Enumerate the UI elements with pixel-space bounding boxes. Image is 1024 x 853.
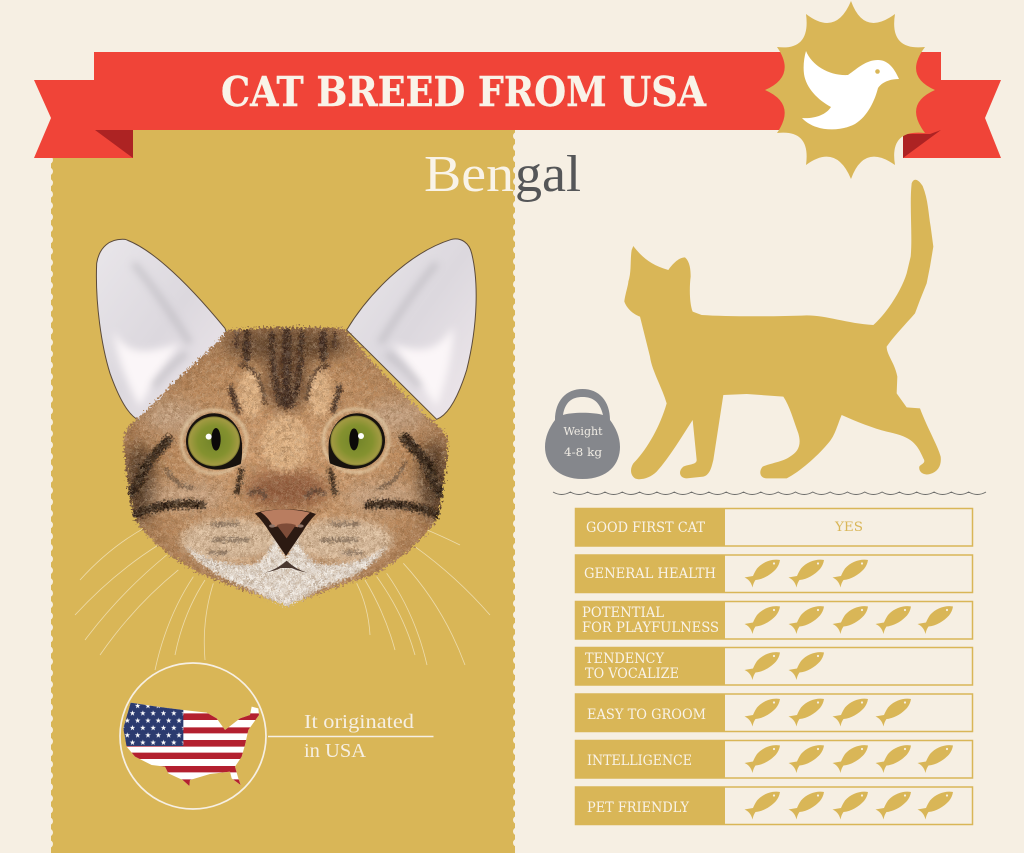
row: easy to groom xyxy=(575,694,972,732)
cheek stripes xyxy=(132,438,440,515)
breed name: Ben xyxy=(424,146,514,203)
row: tendency to vocalize xyxy=(575,647,972,686)
title text: CAT BREED FROM USA xyxy=(221,68,707,116)
right eye xyxy=(329,413,385,469)
head fur xyxy=(117,320,457,613)
badge: gold star with dove xyxy=(765,1,935,179)
row: potential for playfulness: FOR PLAYFULNESS xyxy=(582,620,719,636)
row: good first cat: GOOD FIRST CAT xyxy=(586,520,706,536)
forehead and cheek shading xyxy=(125,328,449,523)
origin text: in USA xyxy=(304,740,367,762)
breed name xyxy=(424,146,581,203)
row: pet friendly xyxy=(575,786,972,825)
panel: gold portrait column xyxy=(49,130,517,853)
row: potential for playfulness xyxy=(575,601,972,640)
weight value: 4-8 kg xyxy=(564,446,602,459)
weight label: Weight xyxy=(564,425,603,438)
light fur texture xyxy=(117,320,457,613)
light forehead patches xyxy=(239,368,332,472)
origin text: It originated xyxy=(304,711,414,733)
origin text xyxy=(304,711,414,762)
cat silhouette xyxy=(624,180,941,479)
row: potential for playfulness: POTENTIAL xyxy=(582,605,664,621)
row: good first cat: YES xyxy=(834,520,863,535)
map circle xyxy=(120,663,266,809)
ribbon right fold xyxy=(903,130,941,158)
icon: dove xyxy=(802,51,899,129)
ribbon right tail xyxy=(903,80,1001,158)
weight icon xyxy=(545,389,620,479)
cat portrait xyxy=(75,239,490,670)
title ribbon xyxy=(34,52,1001,158)
usa flag map xyxy=(123,702,259,786)
left ear xyxy=(96,239,230,421)
row: intelligence: INTELLIGENCE xyxy=(587,753,692,769)
head base xyxy=(117,320,457,613)
muzzle spots xyxy=(210,524,362,553)
row: general health xyxy=(575,554,972,593)
fur texture xyxy=(117,320,457,613)
nose xyxy=(255,509,316,556)
origin map xyxy=(120,663,433,809)
row: pet friendly: PET FRIENDLY xyxy=(587,800,690,816)
breed name: gal xyxy=(515,146,581,203)
mouth xyxy=(265,561,307,573)
wavy divider xyxy=(553,492,986,494)
row: good first cat xyxy=(575,508,972,546)
star badge xyxy=(765,1,935,179)
ratings table xyxy=(575,508,972,825)
ribbon left fold xyxy=(95,130,133,158)
right ear xyxy=(347,239,476,419)
whiskers xyxy=(75,527,490,670)
muzzle colour xyxy=(180,518,393,562)
muzzle white fur xyxy=(185,535,388,610)
leader line xyxy=(268,736,434,738)
row: general health: GENERAL HEALTH xyxy=(584,566,716,582)
left eye xyxy=(186,413,242,470)
row: tendency to vocalize: TENDENCY xyxy=(585,651,665,667)
ribbon left tail xyxy=(34,80,133,158)
eye rims xyxy=(181,409,389,473)
ribbon main band xyxy=(94,52,941,130)
row: easy to groom: EASY TO GROOM xyxy=(587,707,706,723)
row: tendency to vocalize: TO VOCALIZE xyxy=(585,666,679,682)
forehead stripes xyxy=(230,332,340,412)
row: intelligence xyxy=(575,740,972,778)
